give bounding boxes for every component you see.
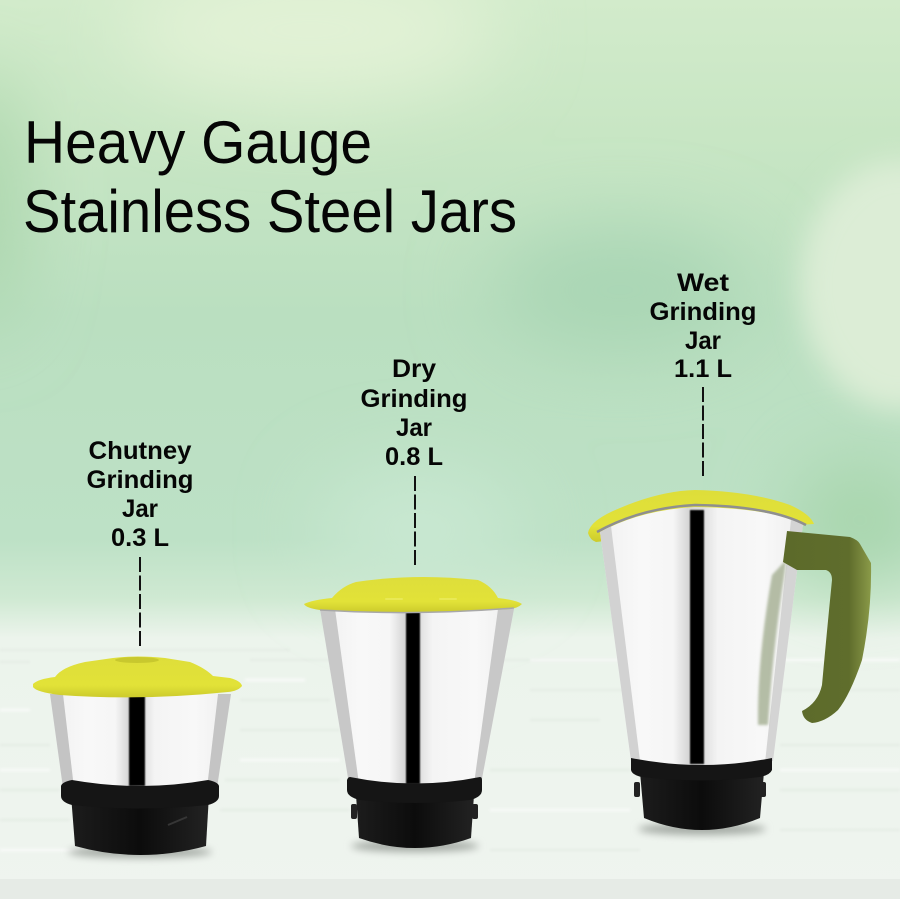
title: Heavy Gauge (24, 109, 372, 176)
jar base (631, 758, 772, 830)
jar lid (304, 577, 522, 613)
jar body (597, 505, 806, 766)
label: dry grinding jar: Jar (396, 414, 432, 442)
jar base (61, 780, 219, 855)
jar: dry (304, 577, 522, 852)
handle reflection (758, 560, 786, 725)
label: wet grinding jar: Wet (677, 269, 730, 297)
label: wet grinding jar (650, 269, 756, 383)
label: chutney grinding jar: Chutney (88, 437, 192, 465)
jar body (320, 609, 514, 784)
title: Stainless Steel Jars (23, 178, 517, 245)
jar lid (588, 490, 814, 542)
label: dry grinding jar: Dry (392, 355, 436, 383)
title (23, 109, 517, 245)
label: dry grinding jar (360, 355, 468, 471)
dashed leader: dry (414, 476, 416, 568)
jar handle (783, 531, 871, 723)
label: wet grinding jar: Grinding (650, 298, 756, 326)
dashed leader: wet (702, 387, 704, 478)
jar: chutney (33, 656, 242, 858)
label: chutney grinding jar (86, 437, 194, 552)
jar base (347, 777, 482, 848)
label: wet grinding jar: Jar (685, 327, 721, 355)
jar body (50, 694, 231, 788)
jar: wet (588, 490, 871, 835)
label: dry grinding jar: 0.8 L (385, 443, 443, 471)
label: chutney grinding jar: Grinding (86, 466, 194, 494)
dashed leader: chutney (139, 557, 141, 648)
label: chutney grinding jar: Jar (122, 495, 158, 523)
jar lid (33, 656, 242, 697)
label: chutney grinding jar: 0.3 L (111, 524, 169, 552)
label: wet grinding jar: 1.1 L (674, 355, 732, 383)
label: dry grinding jar: Grinding (360, 385, 468, 413)
